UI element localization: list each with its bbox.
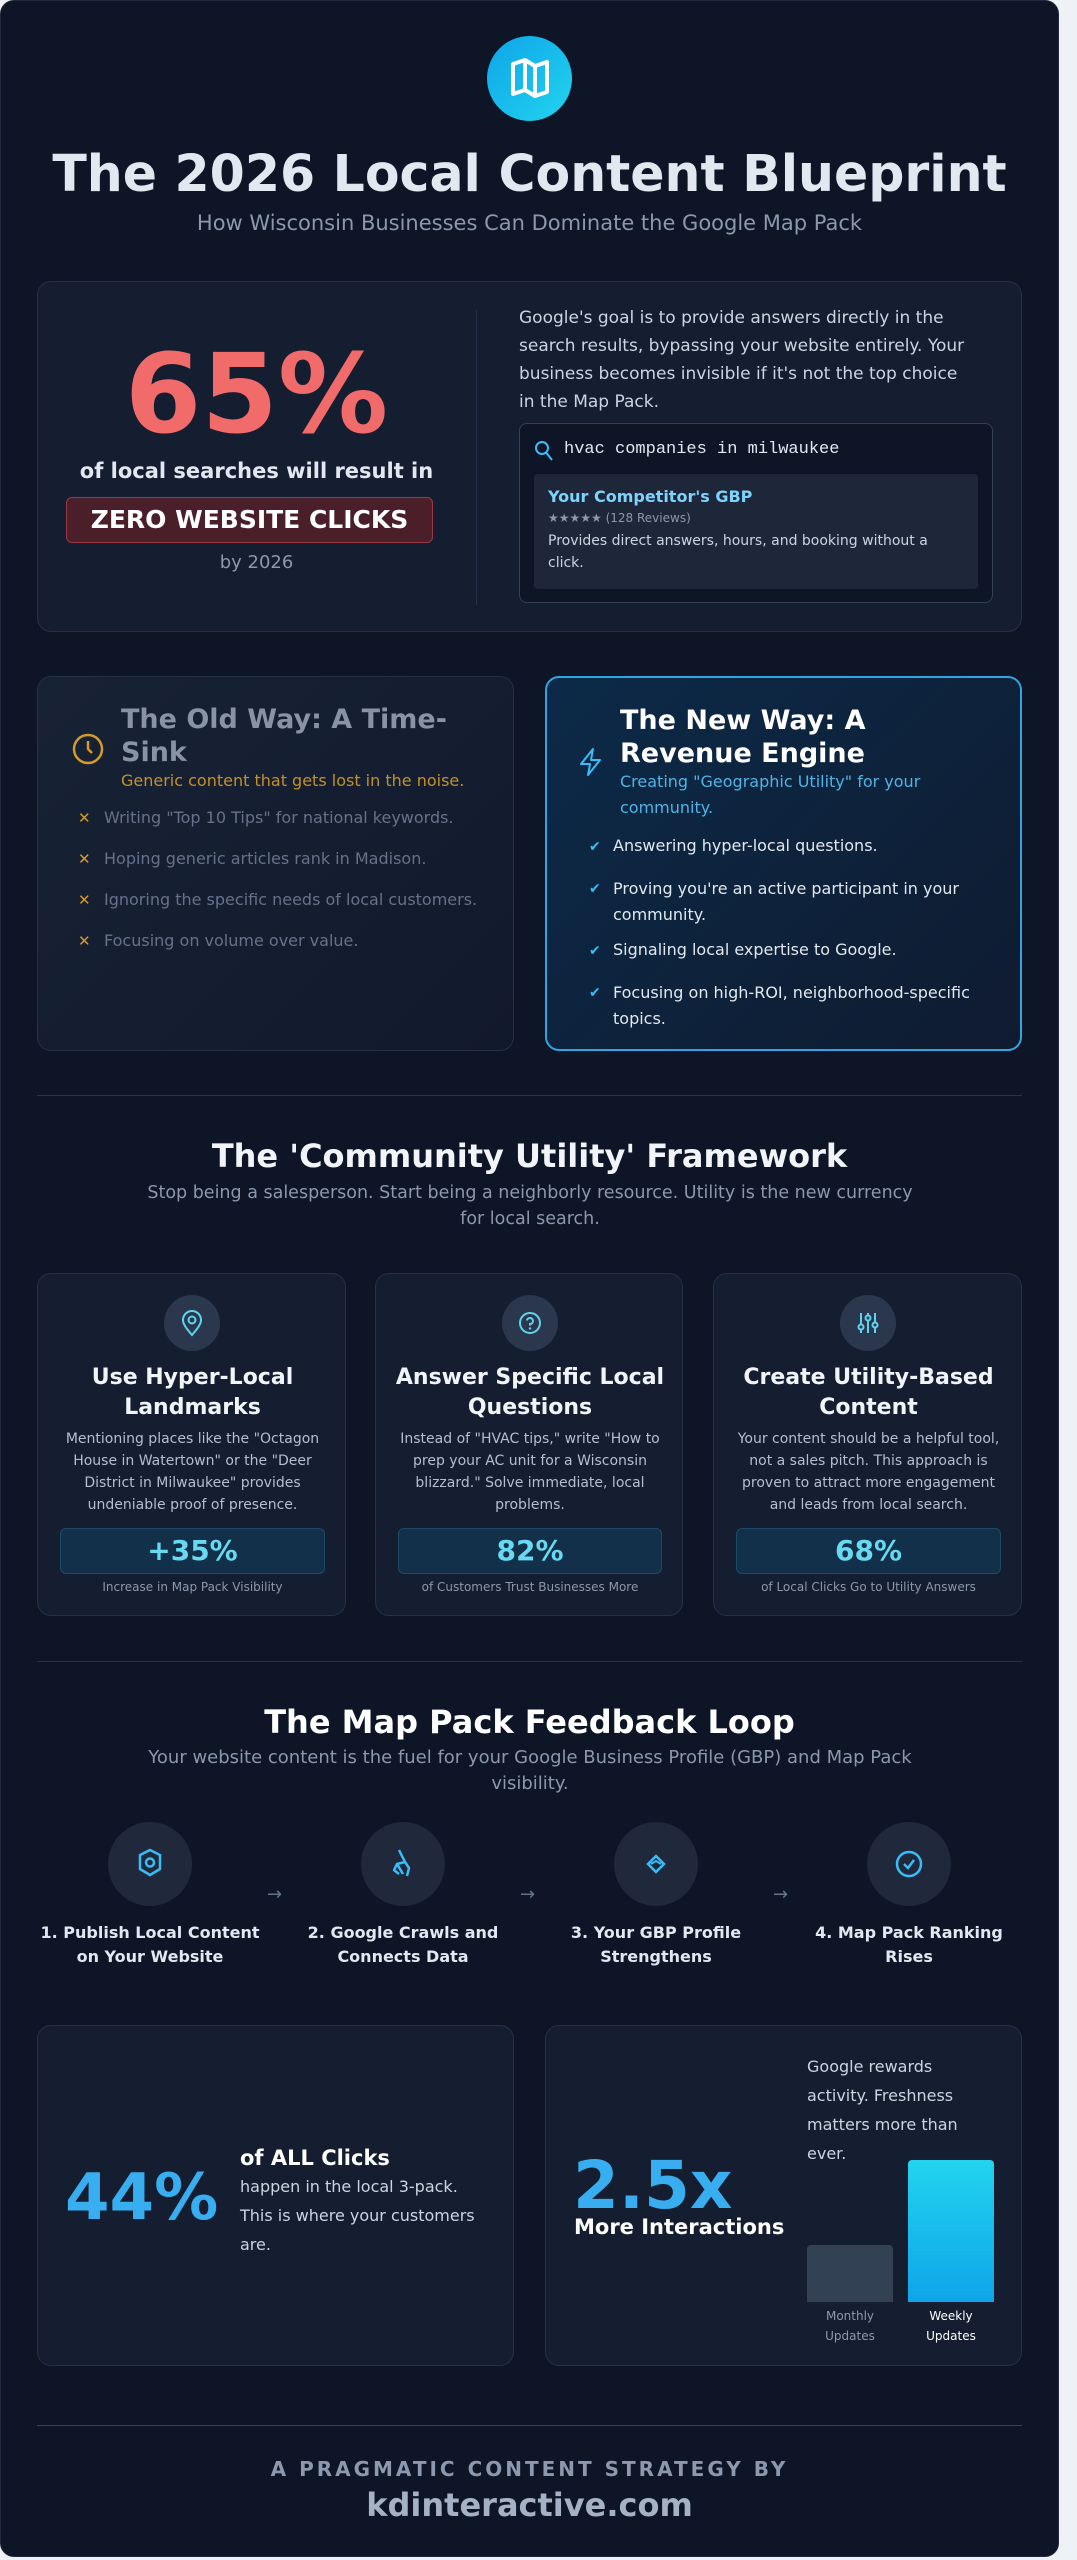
badge: zero website clicks xyxy=(66,497,433,543)
stat label: More Interactions xyxy=(574,2215,784,2239)
panel: old way xyxy=(37,676,514,1051)
step label: 3. Your GBP Profile xyxy=(571,1923,741,1942)
new way list xyxy=(589,836,970,1028)
footer: kdinteractive.com xyxy=(366,2486,693,2524)
card title xyxy=(743,1365,994,1420)
panel: old way: Writing "Top 10 Tips" for national keywords. xyxy=(104,808,454,827)
heading: map pack feedback loop: The Map Pack Feedback Loop xyxy=(264,1703,795,1741)
icon: check circle xyxy=(867,1822,951,1906)
panel: old way: ✕ xyxy=(78,932,91,950)
framework subtitle: for local search. xyxy=(460,1209,600,1229)
stat box xyxy=(398,1528,662,1574)
panel: old way: Focusing on volume over value. xyxy=(104,931,358,950)
card title: Answer Specific Local xyxy=(396,1365,664,1390)
step label xyxy=(571,1923,741,1966)
bar chart: Updates xyxy=(825,2329,875,2343)
competitor result xyxy=(534,474,978,589)
competitor result: Your Competitor's GBP xyxy=(548,487,752,506)
footer xyxy=(270,2457,788,2524)
explanation text: Google's goal is to provide answers directly in the search results, bypassing your website entirely. Your business becomes invisible if it's not the top choice xyxy=(519,308,964,384)
card title: Use Hyper-Local xyxy=(92,1365,293,1390)
stat box: 82% xyxy=(496,1534,564,1567)
step label: Connects Data xyxy=(337,1947,469,1966)
icon: question xyxy=(502,1295,558,1351)
old way heading: Sink xyxy=(121,737,187,768)
panel: new way: Focusing on high-ROI, neighborhood-specific topics. xyxy=(613,983,970,1028)
panel: old way: ✕ xyxy=(78,809,91,827)
search mockup xyxy=(519,423,993,603)
panel: old way: ✕ xyxy=(78,891,91,909)
icon: sliders xyxy=(840,1295,896,1351)
panel: new way: ✔ xyxy=(589,943,601,959)
icon: map pin xyxy=(164,1295,220,1351)
stat heading: of ALL Clicks xyxy=(240,2146,390,2170)
big stat 65%: 65% xyxy=(125,330,388,458)
subtitle: How Wisconsin Businesses Can Dominate the Google Map Pack xyxy=(197,211,862,235)
panel: new way: Answering hyper-local questions. xyxy=(613,836,878,855)
card description: Instead of "HVAC tips," write "How to prep your AC unit for a Wisconsin blizzard." Solve immediate, local problems. xyxy=(400,1431,660,1513)
by 2026: by 2026 xyxy=(220,552,293,573)
competitor result: Provides direct answers, hours, and booking without a click. xyxy=(548,533,928,571)
panel: hyper-local landmarks xyxy=(37,1273,346,1616)
arrow: → xyxy=(520,1884,535,1905)
step label: 1. Publish Local Content xyxy=(40,1923,260,1942)
big stat 2.5x: 2.5x xyxy=(573,2147,732,2224)
step label xyxy=(308,1923,498,1966)
old way heading: The Old Way: A Time- xyxy=(121,704,447,735)
panel: utility-based content xyxy=(713,1273,1022,1616)
panel: old way: Hoping generic articles rank in Madison. xyxy=(104,849,426,868)
stat box: +35% xyxy=(147,1534,238,1567)
footer: A PRAGMATIC CONTENT STRATEGY BY xyxy=(271,2457,788,2481)
bar chart xyxy=(807,2160,994,2343)
new way heading: The New Way: A xyxy=(620,705,866,736)
card description: Mentioning places like the "Octagon House in Watertown" or the "Deer District in Milwaukee" provides undeniable proof of presence. xyxy=(66,1431,319,1513)
icon: crawl xyxy=(361,1822,445,1906)
step label xyxy=(40,1923,260,1966)
title: The 2026 Local Content Blueprint xyxy=(52,144,1007,203)
old way heading xyxy=(121,704,447,768)
step label: 4. Map Pack Ranking xyxy=(815,1923,1003,1942)
bar chart: Updates xyxy=(926,2329,976,2343)
card title xyxy=(92,1365,293,1420)
explanation text: in the Map Pack. xyxy=(519,392,659,412)
step 2 xyxy=(308,1822,498,1966)
stat description: happen in the local 3-pack. This is where your customers are. xyxy=(240,2177,475,2254)
panel: 2.5x interactions xyxy=(545,2025,1022,2366)
new way heading xyxy=(620,705,866,769)
badge: zero website clicks: ZERO WEBSITE CLICKS xyxy=(91,505,408,534)
framework subtitle xyxy=(147,1183,913,1229)
panel: zero click stat xyxy=(37,281,1022,632)
step label: on Your Website xyxy=(77,1947,223,1966)
new way heading: Revenue Engine xyxy=(620,738,865,769)
stat caption: Increase in Map Pack Visibility xyxy=(102,1580,283,1594)
panel: new way: Signaling local expertise to Google. xyxy=(613,940,897,959)
search query: hvac companies in milwaukee xyxy=(564,440,839,459)
heading: community utility framework: The 'Community Utility' Framework xyxy=(212,1137,847,1175)
panel: 44% clicks xyxy=(37,2025,514,2366)
card title: Content xyxy=(819,1395,918,1420)
icon: logo map xyxy=(487,36,572,121)
step label: Strengthens xyxy=(600,1947,712,1966)
panel: new way: ✔ xyxy=(589,839,601,855)
icon: gbp xyxy=(614,1822,698,1906)
step 3 xyxy=(571,1822,741,1966)
step label xyxy=(815,1923,1003,1966)
icon: lightning xyxy=(580,748,601,776)
card title: Create Utility-Based xyxy=(743,1365,994,1390)
panel: new way: ✔ xyxy=(589,985,601,1001)
card title: Questions xyxy=(468,1395,592,1420)
icon: search xyxy=(535,441,553,461)
freshness text: Google rewards activity. Freshness matters more than ever. xyxy=(807,2057,958,2163)
panel: new way: Proving you're an active participant in your community. xyxy=(613,879,959,924)
panel: old way: ✕ xyxy=(78,850,91,868)
panel: new way xyxy=(545,676,1022,1051)
arrow: → xyxy=(267,1884,282,1905)
big stat 44%: 44% xyxy=(65,2161,218,2235)
new way subtitle: Creating "Geographic Utility" for your community. xyxy=(620,772,920,817)
step 4 xyxy=(815,1822,1003,1966)
step label: Rises xyxy=(885,1947,933,1966)
stat box xyxy=(736,1528,1001,1574)
card title: Landmarks xyxy=(124,1395,261,1420)
loop subtitle: Your website content is the fuel for your Google Business Profile (GBP) and Map Pack visibility. xyxy=(148,1747,912,1794)
panel: new way: ✔ xyxy=(589,881,601,897)
arrow: → xyxy=(773,1884,788,1905)
stat caption: of Local Clicks Go to Utility Answers xyxy=(761,1580,976,1594)
panel: old way: Ignoring the specific needs of local customers. xyxy=(104,890,477,909)
card description: Your content should be a helpful tool, not a sales pitch. This approach is proven to attract more engagement and leads from local search. xyxy=(738,1431,999,1513)
card title xyxy=(396,1365,664,1420)
step 1 xyxy=(40,1822,260,1966)
old way list xyxy=(78,808,477,950)
old way subtitle: Generic content that gets lost in the noise. xyxy=(121,771,464,790)
step label: 2. Google Crawls and xyxy=(308,1923,498,1942)
panel: specific local questions xyxy=(375,1273,683,1616)
bar chart: Weekly xyxy=(929,2309,973,2323)
stat box xyxy=(60,1528,325,1574)
bar chart: Monthly xyxy=(826,2309,874,2323)
stat box: 68% xyxy=(835,1534,902,1567)
icon: clock xyxy=(72,734,104,764)
competitor result: ★★★★★ (128 Reviews) xyxy=(548,511,691,525)
icon: publish xyxy=(108,1822,192,1906)
stat caption: of local searches will result in xyxy=(80,459,433,483)
stat caption: of Customers Trust Businesses More xyxy=(422,1580,638,1594)
framework subtitle: Stop being a salesperson. Start being a neighborly resource. Utility is the new currency xyxy=(147,1183,913,1203)
